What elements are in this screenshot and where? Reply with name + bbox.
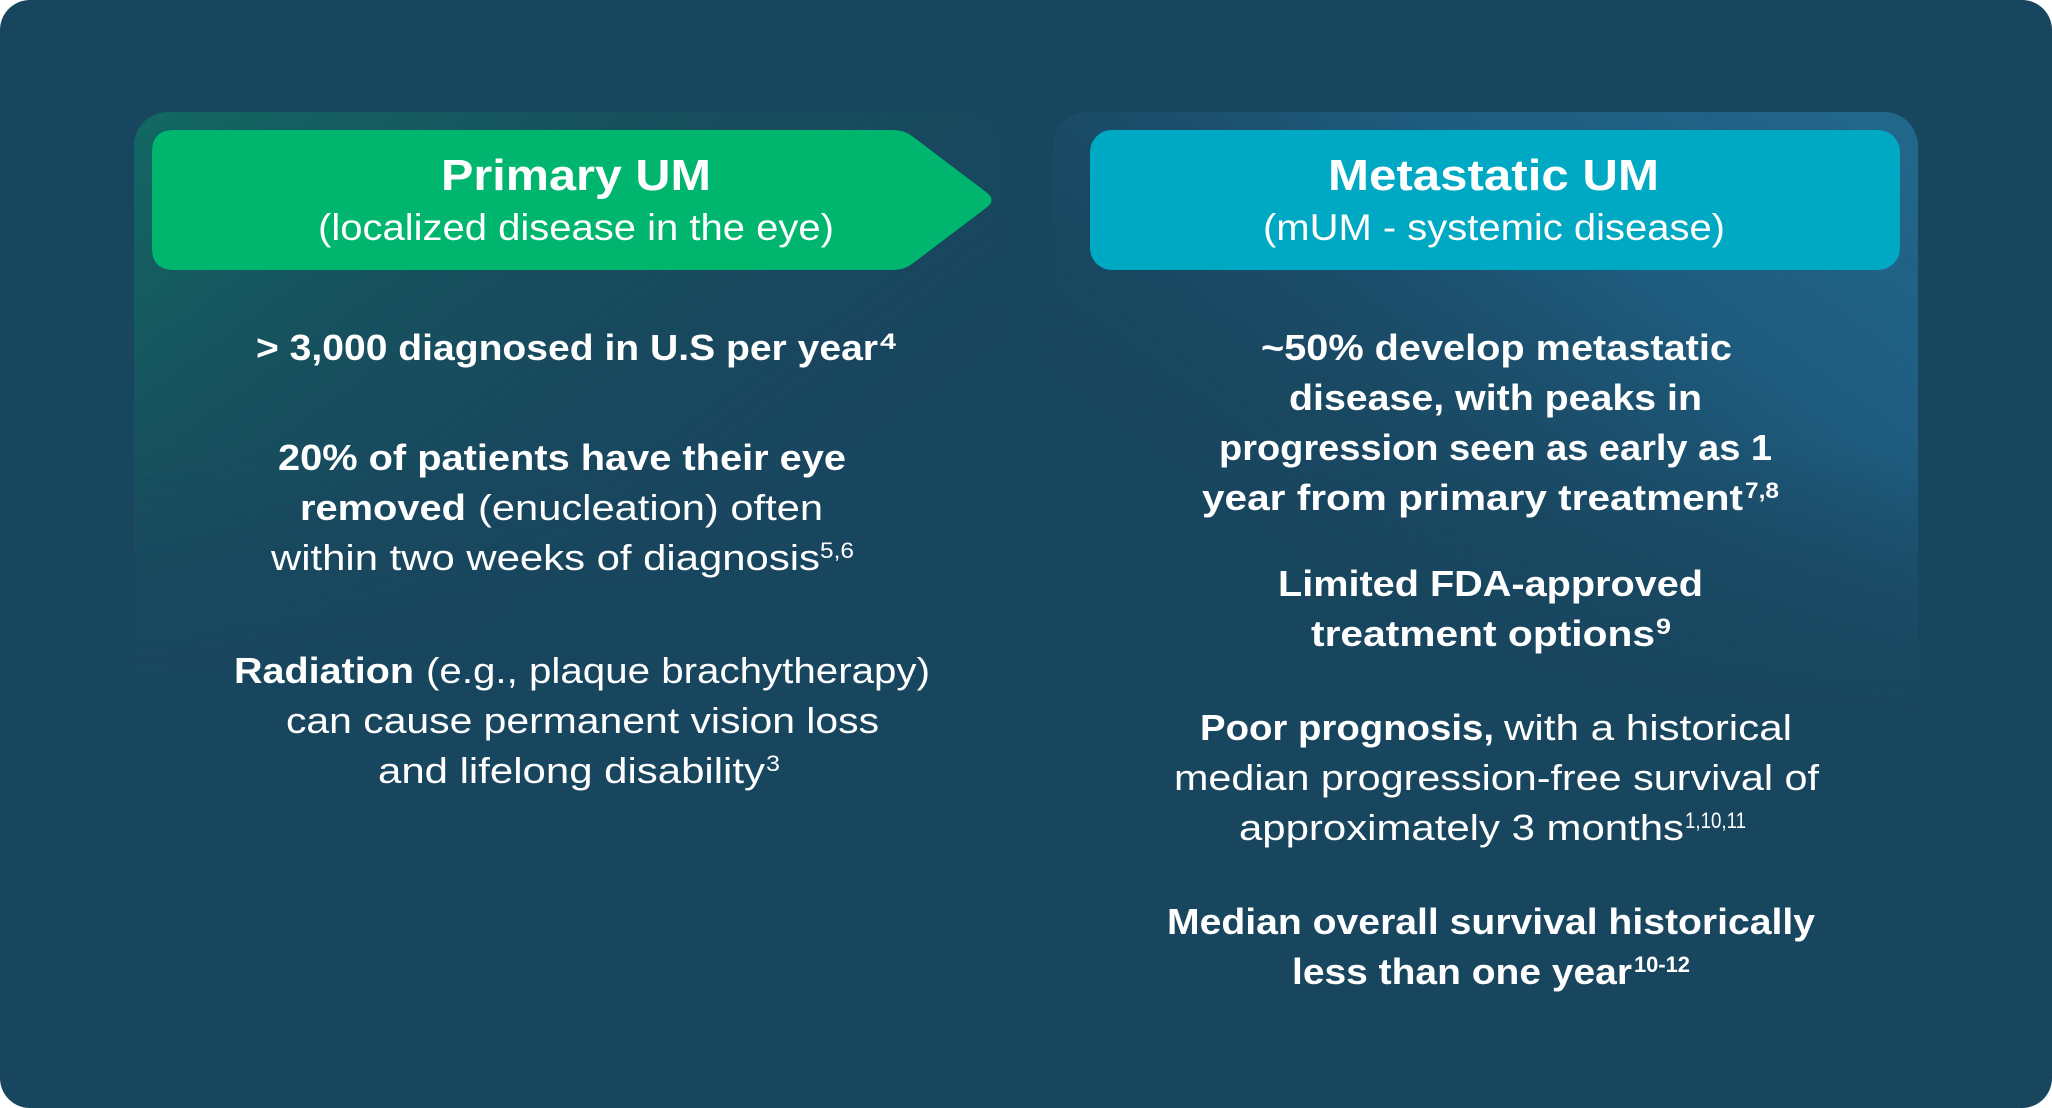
panel background: primary UM [134, 112, 737, 498]
text block: poor prognosis: approximately 3 months [1239, 807, 1684, 848]
text block: poor prognosis: 1,10,11 [1685, 808, 1746, 833]
text block: eye removal: 20% of patients have their eye [278, 437, 846, 478]
text block: radiation: and lifelong disability [378, 750, 765, 791]
panel: primary UM [134, 112, 997, 791]
text block: radiation: Radiation [234, 650, 414, 691]
text block: radiation: can cause permanent vision loss [286, 700, 879, 741]
heading: Metastatic UM: Metastatic UM [1328, 151, 1659, 200]
arrow shape [152, 130, 992, 270]
banner: metastatic UM [1090, 130, 1900, 270]
text block: limited treatment options [1278, 563, 1703, 654]
text block: diagnosed per year: 4 [880, 329, 897, 354]
subheading: systemic disease: (mUM - systemic disease) [1263, 207, 1725, 248]
text block: eye removal: within two weeks of diagnosis [270, 537, 820, 578]
text block: develop metastatic disease: ~50% develop metastatic [1261, 327, 1732, 368]
text block: median overall survival [1167, 901, 1815, 992]
text block: radiation: 3 [766, 751, 780, 776]
panel background: metastatic UM [1064, 112, 1918, 596]
text block: limited treatment options: Limited FDA-approved [1278, 563, 1703, 604]
text block: eye removal: (enucleation) often [478, 487, 823, 528]
text block: develop metastatic disease [1202, 327, 1779, 518]
text block: develop metastatic disease: disease, with peaks in [1289, 377, 1702, 418]
text block: limited treatment options: treatment options [1311, 613, 1655, 654]
text block: eye removal: removed [300, 487, 466, 528]
text block: median overall survival: Median overall survival historically [1167, 901, 1815, 942]
text block: poor prognosis: Poor prognosis, [1200, 707, 1494, 748]
text block: poor prognosis: with a historical [1503, 707, 1792, 748]
text block: eye removal [270, 437, 854, 578]
subheading: localized disease: (localized disease in the eye) [318, 207, 834, 248]
text block: radiation: (e.g., plaque brachytherapy) [426, 650, 930, 691]
banner shape [1090, 130, 1900, 270]
text block: diagnosed per year: > 3,000 diagnosed in U.S per year [256, 327, 878, 368]
text block: develop metastatic disease: year from primary treatment [1202, 477, 1743, 518]
text block: develop metastatic disease: 7,8 [1745, 478, 1779, 503]
text block: develop metastatic disease: progression seen as early as 1 [1219, 427, 1772, 468]
text block: poor prognosis [1174, 707, 1820, 848]
text block: median overall survival: 10-12 [1634, 952, 1690, 977]
text block: eye removal: 5,6 [820, 538, 854, 563]
text block: median overall survival: less than one year [1292, 951, 1632, 992]
text block: poor prognosis: median progression-free survival of [1174, 757, 1820, 798]
heading: Primary UM: Primary UM [441, 151, 711, 200]
text block: limited treatment options: 9 [1656, 614, 1671, 639]
text block: radiation [234, 650, 930, 791]
panel: metastatic UM [1053, 112, 1918, 992]
arrow banner: primary UM [152, 130, 992, 270]
